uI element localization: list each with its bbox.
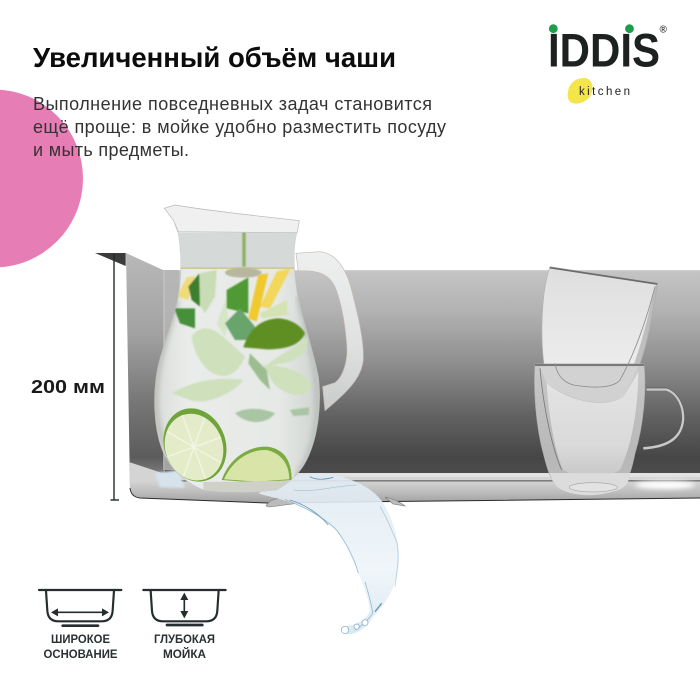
dimension line: 200 mm xyxy=(110,254,119,500)
registered mark: ® xyxy=(660,24,668,36)
jug neck frosted band xyxy=(177,233,298,268)
pink decorative circle xyxy=(0,90,83,268)
splash left of jug xyxy=(155,470,185,488)
lower cup upper band xyxy=(540,367,638,402)
description text: Выполнение повседневных задач становится xyxy=(33,94,432,114)
jug rim xyxy=(164,205,299,233)
floor highlights xyxy=(170,473,700,489)
lemon slices xyxy=(177,268,291,322)
label: wide base: ШИРОКОЕ xyxy=(51,632,110,646)
logo green dots xyxy=(549,24,634,33)
kitchen label: kitchen xyxy=(579,86,630,98)
dimension label: 200 мм xyxy=(31,376,105,397)
lime slice small flesh xyxy=(224,450,289,482)
pale leaves xyxy=(172,270,312,422)
label: deep sink: МОЙКА xyxy=(163,646,206,661)
lime slice large xyxy=(164,408,226,482)
label: deep sink: ГЛУБОКАЯ xyxy=(154,632,215,646)
glass cups xyxy=(535,267,685,495)
jug glass body xyxy=(155,205,320,492)
upper cup rim xyxy=(550,268,657,284)
water jug with mint and lime xyxy=(153,205,363,492)
sink floor xyxy=(129,462,700,503)
label: wide base xyxy=(44,632,118,661)
cup handle xyxy=(643,389,683,448)
bottom edge line xyxy=(130,488,700,503)
lower cup inner wall line xyxy=(540,368,562,470)
cup handle edge xyxy=(643,388,685,450)
lower cup rim xyxy=(535,362,644,367)
right glass shading xyxy=(297,297,317,477)
splash body xyxy=(258,473,399,634)
green leaves xyxy=(174,273,248,328)
corner highlight strip xyxy=(163,270,179,470)
lower cup base glass xyxy=(550,473,630,495)
upper cup xyxy=(542,267,657,364)
title: Увеличенный объём чаши xyxy=(33,42,396,73)
sink cross-section xyxy=(95,253,700,507)
flower tip xyxy=(225,268,262,278)
jug base xyxy=(203,480,290,492)
flange xyxy=(95,253,126,266)
description text xyxy=(33,94,446,160)
green lime half xyxy=(243,318,305,349)
water splash xyxy=(258,473,399,634)
water surface line xyxy=(178,267,295,269)
description text: и мыть предметы. xyxy=(33,140,189,160)
brand wordmark: IDDIS xyxy=(548,24,660,76)
mint stem xyxy=(242,227,246,267)
splash droplets xyxy=(341,620,368,634)
splash darker strands xyxy=(285,477,398,630)
icon: deep sink xyxy=(143,590,226,625)
left inner wall xyxy=(126,253,165,492)
upper cup right translucent edge xyxy=(634,284,657,364)
lower cup milky inside xyxy=(547,372,638,476)
icon: wide base sink xyxy=(39,590,121,626)
label: wide base: ОСНОВАНИЕ xyxy=(44,647,118,661)
jug handle xyxy=(296,252,363,411)
contents group xyxy=(172,227,312,422)
logo: IDDIS kitchen xyxy=(548,24,668,104)
description text: ещё проще: в мойке удобно разместить посуду xyxy=(33,117,446,137)
top rim of back wall xyxy=(165,270,700,271)
lime slice small xyxy=(222,447,292,483)
yellow blob xyxy=(568,78,593,104)
mint sprig xyxy=(225,308,255,340)
upper cup bottom seen through xyxy=(555,287,655,387)
lower cup base xyxy=(569,483,617,492)
jug contents, softly blurred xyxy=(153,227,317,492)
glass edge shading xyxy=(156,300,180,473)
label: deep sink xyxy=(154,632,215,661)
back wall xyxy=(165,270,700,474)
lower cup xyxy=(535,364,645,495)
sink bottom feet xyxy=(266,497,405,507)
